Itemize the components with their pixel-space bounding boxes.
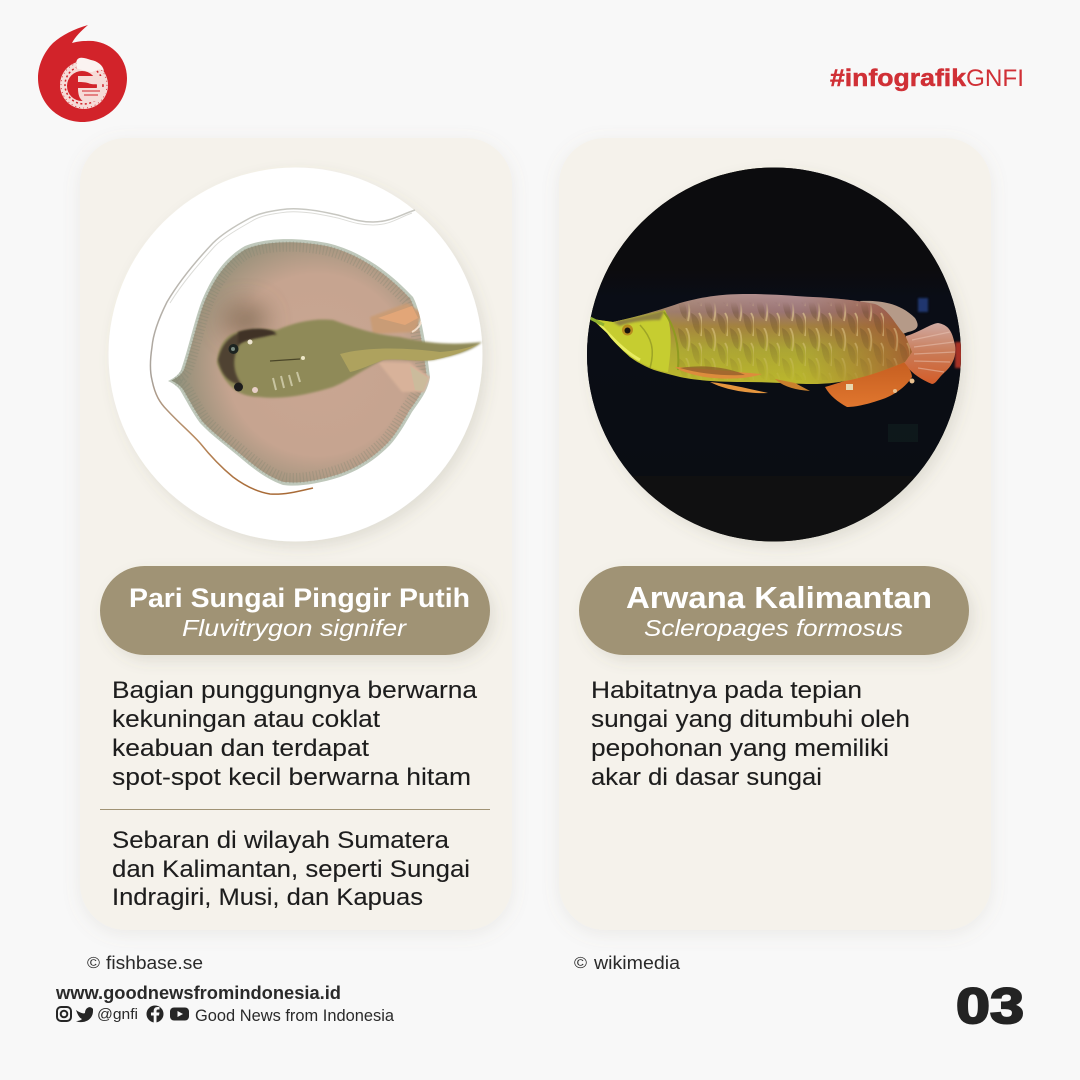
dorsal fin [860, 301, 918, 335]
description left: Bagian punggungnya berwarna [112, 677, 478, 704]
description left [112, 677, 478, 791]
icon: youtube [170, 1008, 189, 1020]
photo: arowana [587, 167, 963, 546]
credit right: wikimedia [593, 953, 681, 973]
icon: instagram [57, 1007, 71, 1021]
anal fin [825, 359, 912, 407]
description left: spot-spot kecil berwarna hitam [112, 764, 471, 791]
name pill right [579, 566, 969, 655]
ventral fins [710, 382, 768, 393]
page number: 03 [956, 978, 1024, 1034]
distribution text left [112, 827, 470, 911]
specks [846, 384, 853, 390]
distribution text left: Sebaran di wilayah Sumatera [112, 827, 450, 854]
description left: kekuningan atau coklat [112, 706, 380, 733]
panel: Pari Sungai Pinggir Putih [80, 138, 512, 930]
hashtag: GNFI [966, 65, 1024, 92]
description right: pepohonan yang memiliki [591, 735, 889, 762]
name pill left [100, 566, 490, 655]
eye [622, 324, 633, 336]
icon: twitter [76, 1007, 93, 1022]
panel background right [559, 138, 991, 930]
credit right: © [574, 955, 587, 972]
panel background left [80, 138, 512, 930]
name pill left: Pari Sungai Pinggir Putih [129, 583, 470, 613]
distribution text left: dan Kalimantan, seperti Sungai [112, 856, 470, 883]
distribution text left: Indragiri, Musi, dan Kapuas [112, 884, 423, 911]
website url: www.goodnewsfromindonesia.id [55, 983, 341, 1003]
credit left: fishbase.se [106, 953, 203, 973]
panel: Arwana Kalimantan [559, 138, 991, 930]
hashtag [830, 65, 1024, 92]
description left: keabuan dan terdapat [112, 735, 369, 762]
logo: GNFI red six with garuda G [38, 25, 127, 122]
description right [591, 677, 910, 791]
hashtag: #infografik [830, 65, 967, 92]
tail fin [903, 323, 955, 384]
social row [57, 1006, 395, 1025]
body [592, 294, 912, 384]
photo: white-edge river stingray [108, 168, 482, 542]
icon: facebook [146, 1006, 164, 1023]
credit left: © [87, 955, 100, 972]
handle: @gnfi [97, 1006, 138, 1023]
pectoral fin [675, 367, 762, 379]
name pill left: Fluvitrygon signifer [182, 615, 408, 641]
name pill right: Scleropages formosus [644, 615, 904, 641]
page name: Good News from Indonesia [195, 1006, 395, 1025]
description right: Habitatnya pada tepian [591, 677, 862, 704]
barbel [590, 318, 604, 325]
description right: sungai yang ditumbuhi oleh [591, 706, 910, 733]
name pill right: Arwana Kalimantan [626, 580, 932, 615]
description right: akar di dasar sungai [591, 764, 822, 791]
